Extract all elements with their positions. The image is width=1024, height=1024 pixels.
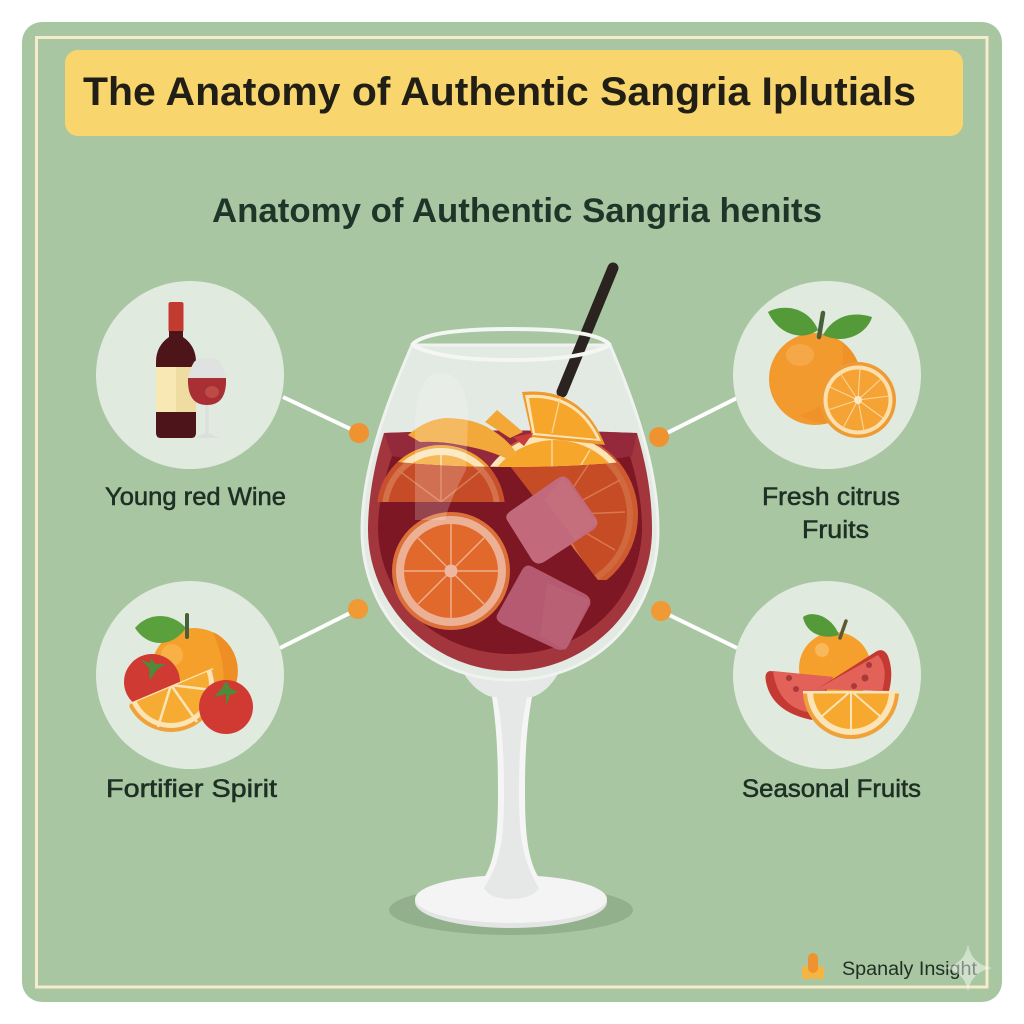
left orange slice in wine — [378, 445, 505, 502]
panel: young red wine — [96, 281, 284, 469]
subtitle: Anatomy of Authentic Sangria henits — [212, 192, 822, 230]
right orange slice in wine — [510, 436, 638, 580]
lit fruit at the wine surface — [398, 437, 616, 467]
icon: orange leaves — [768, 308, 872, 339]
title banner — [65, 50, 963, 136]
icon: tomato left — [124, 654, 180, 710]
icon: tomato right — [199, 680, 253, 734]
label: fresh citrus fruits: Fresh citrus — [762, 483, 900, 511]
icon: whole orange — [769, 333, 861, 425]
ice cube lower — [497, 566, 590, 650]
glass highlight — [415, 373, 468, 520]
wine glass illustration — [362, 268, 658, 935]
icon: orange with leaf — [135, 615, 238, 714]
title banner: The Anatomy of Authentic Sangria Iplutials — [83, 70, 916, 114]
glass base shadow — [389, 885, 633, 935]
icon: orange with leaf — [799, 614, 871, 704]
icon: wine bottle — [156, 302, 196, 438]
label: fortifier spirit: Fortifier Spirit — [106, 775, 277, 803]
connector: young red wine — [283, 397, 369, 443]
icon: sparkle — [944, 944, 992, 992]
panel: seasonal fruits — [733, 581, 921, 769]
top orange wedge — [522, 391, 605, 445]
large orange slice — [392, 512, 510, 630]
ice cube upper — [506, 477, 598, 564]
connector: fresh citrus — [649, 398, 737, 447]
label: fresh citrus fruits — [762, 483, 900, 544]
icon: watermelon right — [817, 650, 891, 691]
icon: orange slice — [820, 362, 896, 438]
label: young red wine: Young red Wine — [105, 483, 286, 511]
brand footer — [802, 944, 992, 992]
panel: fortifier spirit — [96, 581, 284, 769]
label: seasonal fruits: Seasonal Fruits — [742, 775, 921, 803]
wine liquid — [368, 430, 652, 671]
icon: orange wedge — [129, 668, 217, 732]
glass stem and foot — [415, 672, 607, 928]
connector: fortifier spirit — [280, 599, 368, 648]
glass bowl — [362, 345, 658, 680]
icon: orange wedge — [803, 691, 899, 739]
straw — [562, 268, 613, 392]
peach wedges — [408, 410, 533, 459]
icon: wine glass — [188, 358, 226, 438]
label: fresh citrus fruits: Fruits — [802, 516, 869, 544]
brand name: Spanaly Insight — [842, 959, 978, 980]
panel: fresh citrus — [733, 281, 921, 469]
glass rim — [412, 329, 610, 360]
connector: seasonal fruits — [651, 601, 737, 648]
icon: watermelon left — [766, 671, 833, 720]
icon: brand logo — [802, 953, 824, 979]
